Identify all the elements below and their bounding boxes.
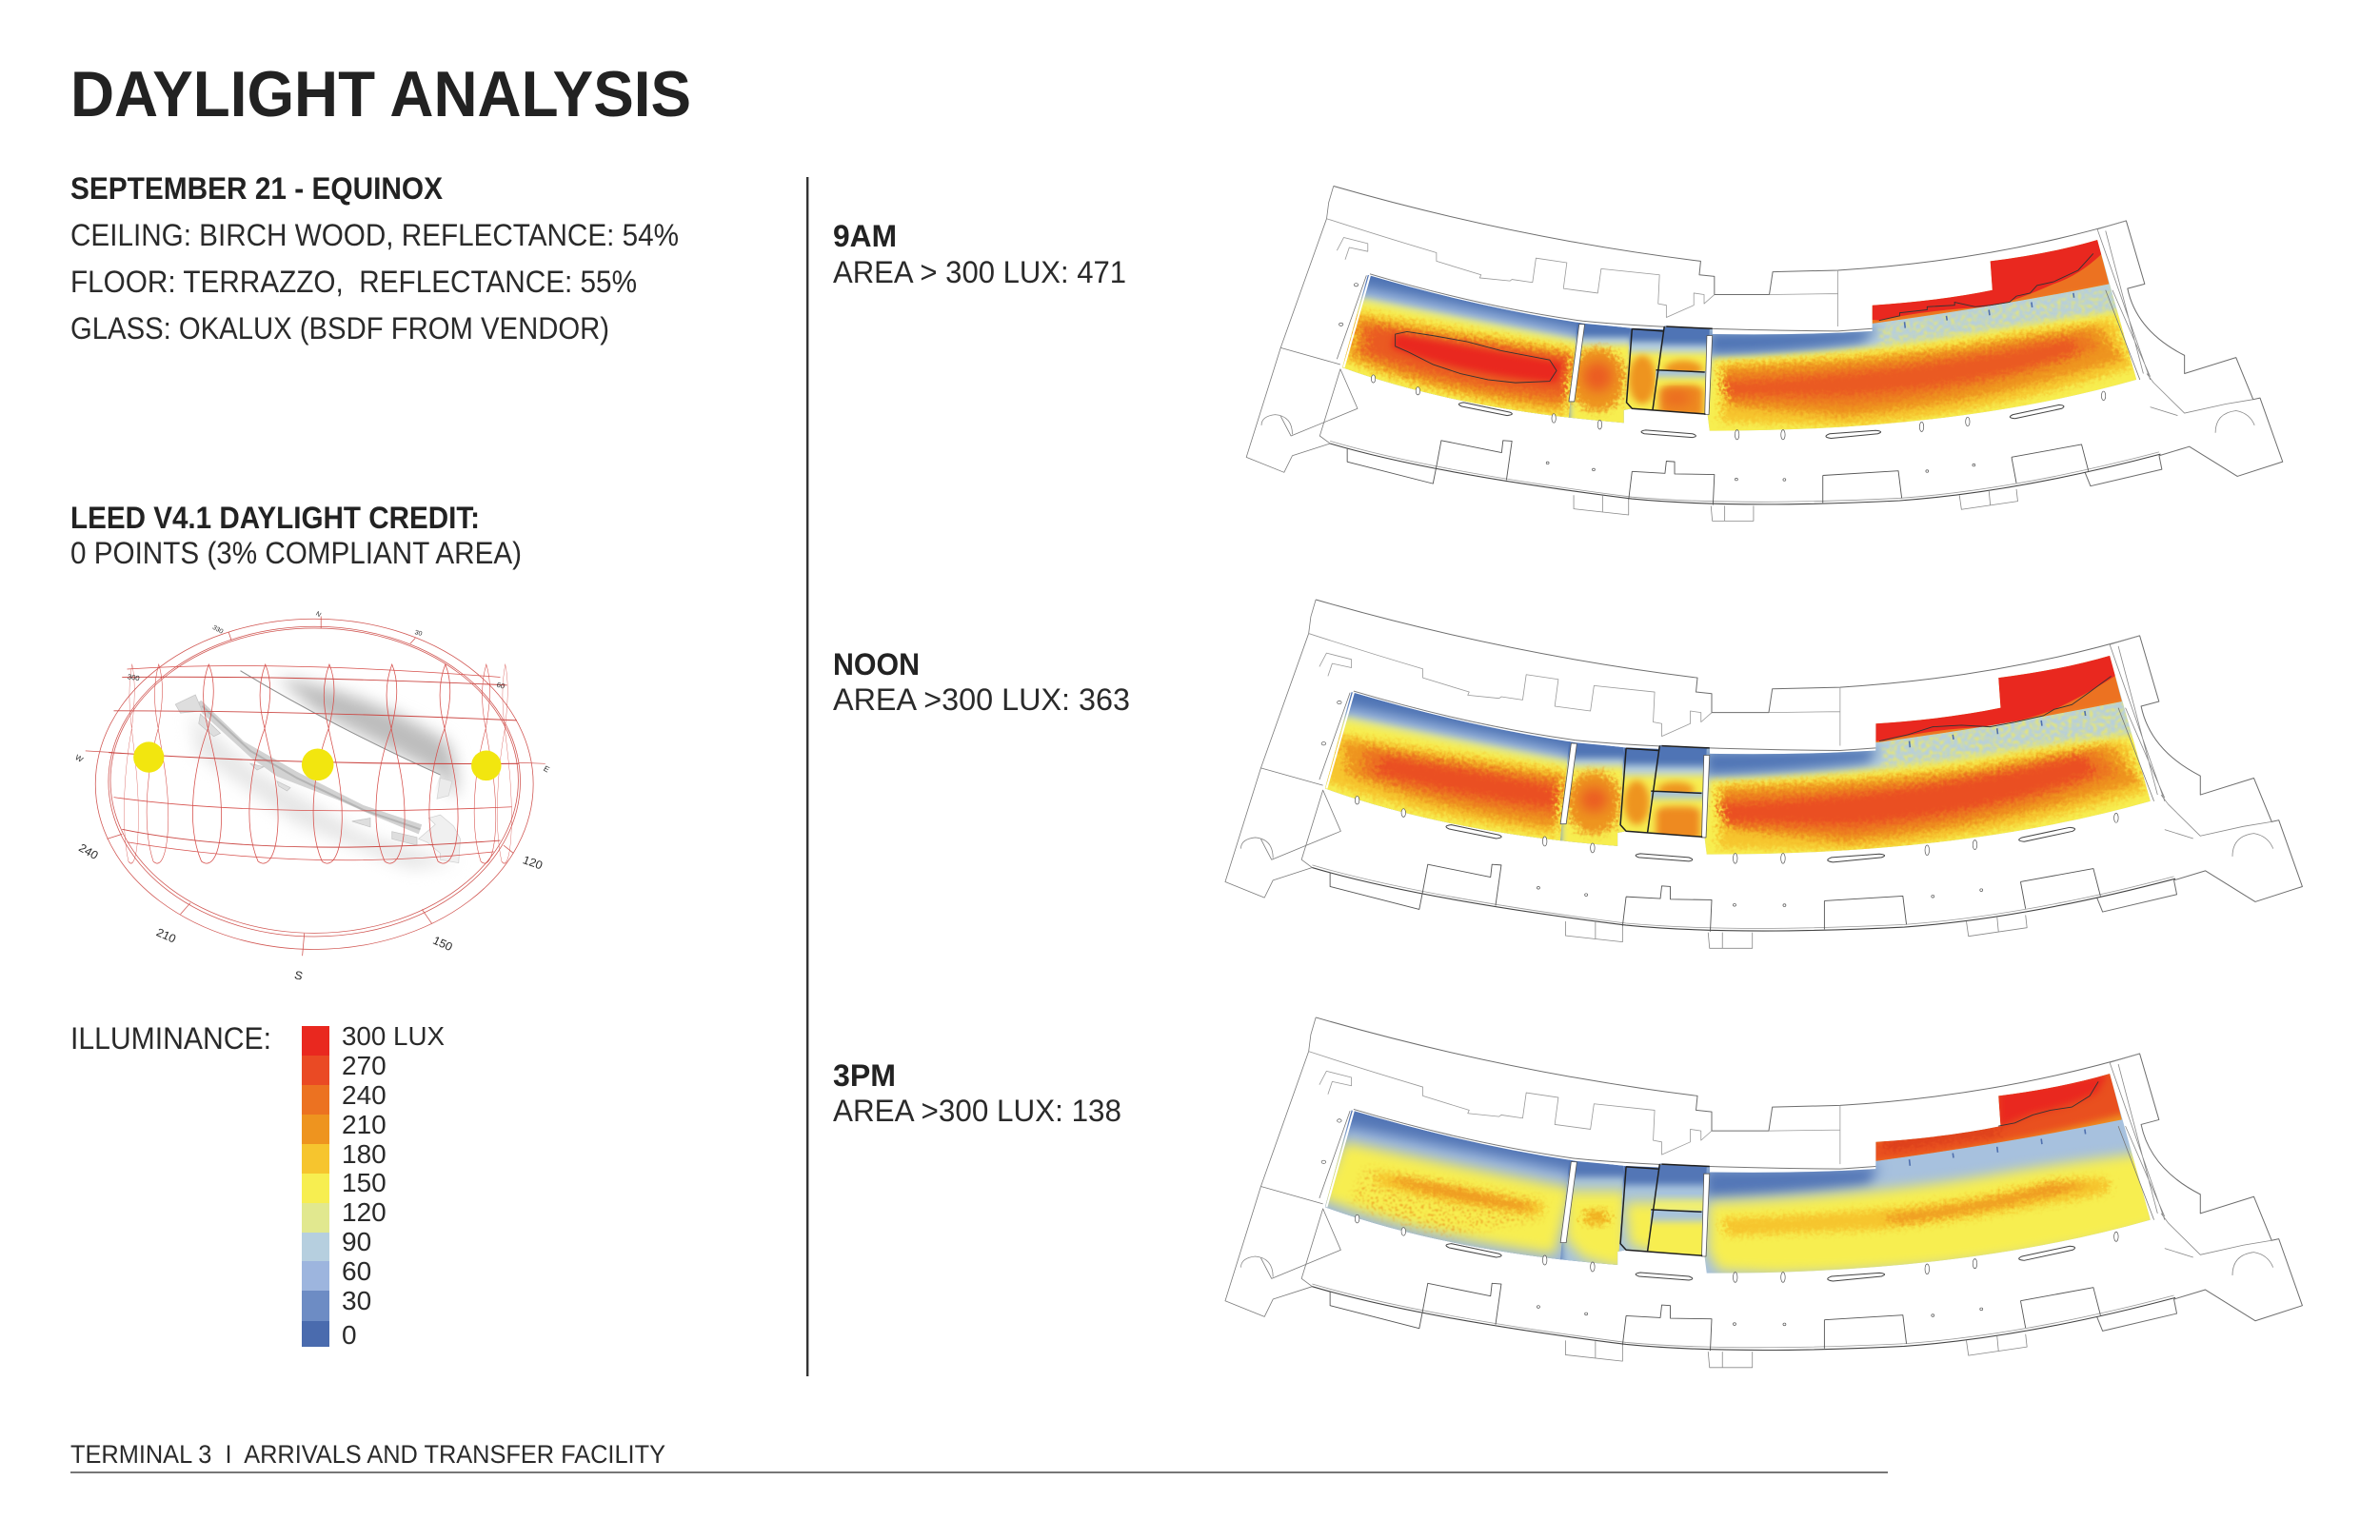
legend labels: 270 (342, 1051, 387, 1080)
compass labels: 240 (76, 841, 101, 862)
label: 9AM: AREA > 300 LUX: 471 (833, 255, 1126, 289)
label: 3PM: AREA >300 LUX: 138 (833, 1094, 1121, 1128)
illuminance legend: ILLUMINANCE: (70, 1021, 271, 1056)
legend labels: 180 (342, 1139, 387, 1169)
heat map (1277, 1067, 2183, 1290)
daylight plan: 3PM (1225, 1017, 2302, 1368)
floor plan outline (1225, 600, 2302, 948)
legend labels: 300 LUX (342, 1021, 445, 1051)
legend colour scale (302, 1026, 329, 1347)
compass labels: S (293, 968, 305, 983)
legend labels: 240 (342, 1080, 387, 1110)
label: NOON (833, 647, 1130, 717)
divider (806, 177, 808, 1376)
compass labels: 150 (430, 934, 455, 954)
label: NOON: NOON (833, 647, 920, 681)
compass labels: 330 (211, 624, 225, 636)
daylight plan: NOON (1225, 600, 2302, 948)
text block: LEED credit: LEED V4.1 DAYLIGHT CREDIT: (70, 501, 480, 535)
floor plan outline (1246, 187, 2283, 521)
building massing model (175, 671, 461, 869)
illuminance legend (70, 1021, 445, 1350)
illuminance contour (1396, 253, 2093, 383)
illuminance contour (1879, 676, 2112, 741)
label: NOON: AREA >300 LUX: 363 (833, 682, 1130, 717)
compass labels: E (542, 764, 551, 775)
footer: TERMINAL 3 I ARRIVALS AND TRANSFER FACILITY (70, 1440, 665, 1469)
label: 9AM: 9AM (833, 219, 897, 253)
label: 3PM: 3PM (833, 1058, 896, 1093)
text block: date and materials (70, 171, 679, 346)
compass labels: W (73, 753, 85, 764)
legend labels: 150 (342, 1168, 387, 1197)
heat map (1296, 230, 2168, 446)
label: 3PM (833, 1058, 1121, 1128)
compass rings (86, 617, 545, 956)
floor plan outline (1225, 1017, 2302, 1368)
compass labels: 300 (127, 672, 140, 682)
illuminance contour (1998, 1081, 2098, 1126)
sun path diagram (73, 611, 551, 983)
compass labels: N (314, 611, 322, 619)
legend labels: 0 (342, 1320, 357, 1350)
text block: date and materials: GLASS: OKALUX (BSDF FROM VENDOR) (70, 311, 609, 346)
legend labels: 30 (342, 1286, 371, 1315)
legend labels: 90 (342, 1227, 371, 1256)
compass labels (73, 611, 551, 983)
text block: date and materials: FLOOR: TERRAZZO, REFLECTANCE: 55% (70, 265, 637, 299)
compass labels: 30 (414, 629, 423, 638)
text block: LEED credit (70, 501, 522, 570)
heat map (1277, 646, 2183, 871)
legend labels: 210 (342, 1110, 387, 1139)
legend labels: 120 (342, 1197, 387, 1227)
sun path curves (109, 664, 519, 863)
compass labels: 210 (154, 926, 178, 946)
compass labels: 60 (496, 681, 506, 691)
legend labels: 60 (342, 1256, 371, 1286)
title: DAYLIGHT ANALYSIS (70, 58, 691, 130)
daylight plan: 9AM (1246, 187, 2283, 521)
text block: date and materials: SEPTEMBER 21 - EQUINOX (70, 171, 444, 206)
compass labels: 120 (521, 853, 545, 872)
sun positions (133, 741, 502, 780)
label: 9AM (833, 219, 1126, 289)
text block: LEED credit: 0 POINTS (3% COMPLIANT AREA) (70, 536, 522, 570)
legend labels (342, 1021, 445, 1350)
text block: date and materials: CEILING: BIRCH WOOD, REFLECTANCE: 54% (70, 218, 679, 252)
